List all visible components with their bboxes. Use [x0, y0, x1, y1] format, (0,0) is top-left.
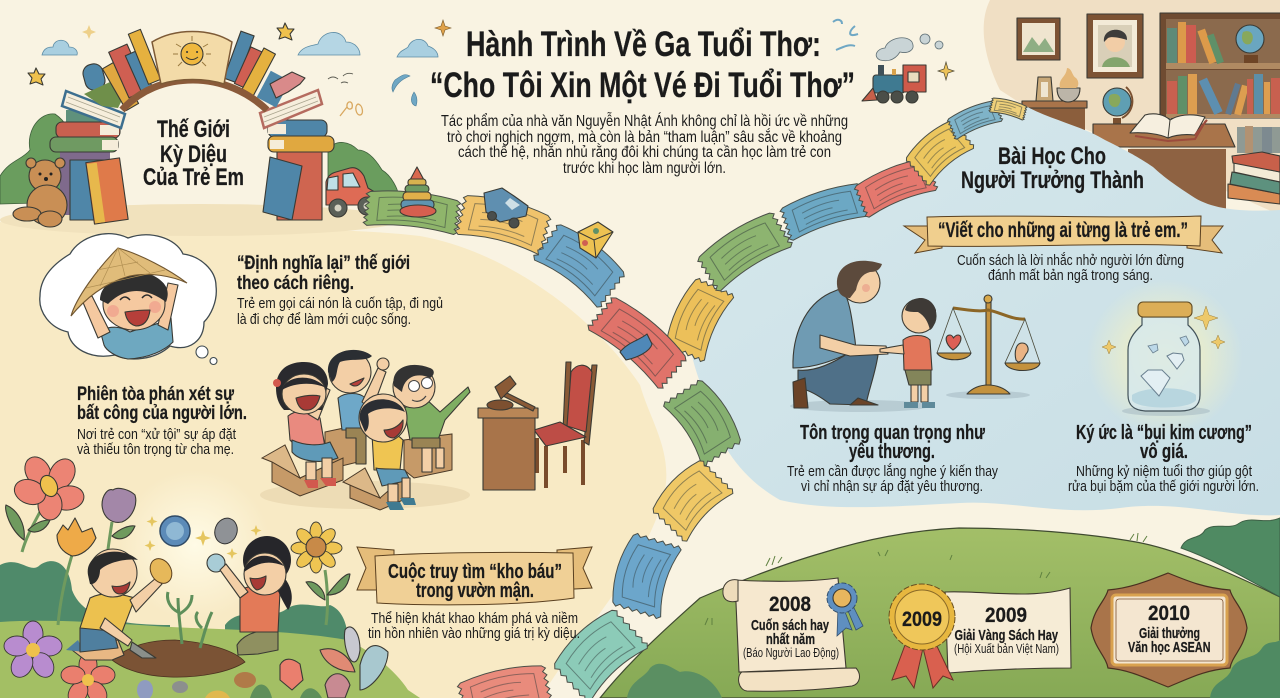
garden background bushes: [0, 561, 170, 640]
desk: [1093, 124, 1280, 211]
arch band: [122, 80, 267, 110]
bush bottom centre: [627, 664, 722, 698]
girl holding coin: [220, 536, 292, 655]
arch right stack: [260, 90, 334, 220]
award: 2008 scroll: Cuốn sách hay: [751, 617, 829, 634]
soil mound: [112, 640, 245, 677]
thought bubble: child with conical hat: [40, 234, 217, 364]
room wall: [984, 0, 1280, 215]
text: respect: yêu thương.: [849, 441, 935, 463]
ribbon: written for those who were children: “Viết cho những ai từng là trẻ em.”: [938, 219, 1188, 242]
text: respect: Trẻ em cần được lắng nghe ý kiến thay: [787, 463, 999, 480]
hat toy on red ticket: [620, 334, 652, 360]
purple flower: [4, 621, 62, 681]
award: 2009 gold medal and flag: 2009: [985, 604, 1027, 627]
illustration: balance scale: [937, 295, 1040, 399]
blue truck: [484, 188, 528, 228]
ribbon: treasure hunt: [357, 547, 592, 605]
toy train: [862, 34, 943, 103]
main title: “Cho Tôi Xin Một Vé Đi Tuổi Thơ”: [430, 66, 855, 105]
intro text: trò chơi nghịch ngợm, mà còn là bản “tham luận” sâu sắc về khoảng: [447, 129, 842, 146]
medal ribbons: [892, 642, 953, 688]
ribbon: treasure hunt: trong vườn mận.: [416, 580, 534, 602]
award: 2008 scroll: 2008: [769, 593, 811, 616]
background: arch ground: [0, 204, 400, 236]
teddy bear: [13, 158, 67, 227]
illustration: father and child handshake: [790, 261, 936, 412]
bubble: [40, 234, 216, 359]
text: children's court: và thiếu tôn trọng từ cha mẹ.: [77, 442, 234, 458]
title: magic world: Kỳ Diệu: [160, 141, 227, 168]
boxes: [262, 425, 452, 510]
arch left stack: [50, 91, 128, 224]
text: book reminder: [957, 252, 1184, 284]
toys on tickets: [400, 167, 652, 360]
intro text: [441, 113, 848, 177]
illustration: children on boxes: [260, 350, 470, 510]
child face: [103, 278, 165, 330]
bush top right: [1181, 518, 1280, 597]
side cabinet with photo and bowl: [1022, 68, 1087, 130]
award: 2010 wooden plaque: Giải thưởng: [1139, 625, 1200, 642]
text: diamond dust memories: [1068, 422, 1259, 495]
child arms: [82, 283, 178, 338]
ground: [0, 621, 420, 698]
bush left: [0, 114, 74, 204]
child shirt: [100, 318, 173, 359]
conical hat: [71, 248, 187, 316]
text: book reminder: đánh mất bản ngã trong sáng.: [988, 268, 1153, 284]
girl: [273, 362, 338, 488]
room illustration: [984, 0, 1280, 215]
red flower: [61, 653, 115, 698]
arch books on top: [81, 29, 305, 110]
title: magic world: [143, 116, 244, 191]
toy car: [326, 168, 380, 217]
text: respect: Tôn trọng quan trọng như: [800, 422, 985, 444]
ribbon: written for those who were children: [904, 216, 1223, 253]
title: magic world: Thế Giới: [157, 116, 230, 143]
text: redefine the world: [237, 252, 443, 328]
heading: lessons for adults: Bài Học Cho: [998, 143, 1106, 170]
bush bottom right: [1210, 640, 1280, 698]
text: children's court: [77, 383, 247, 458]
award: 2009 gold medal and flag: (Hội Xuất bản Việt Nam): [954, 642, 1059, 656]
text: redefine the world: theo cách riêng.: [237, 272, 354, 294]
illustration: judge's desk, gavel and chair: [478, 362, 597, 490]
blue shirt boy: [328, 350, 389, 464]
large leaves foreground: [205, 627, 388, 698]
text: respect: [787, 422, 999, 495]
bush right: [328, 142, 398, 194]
sunflower: [291, 522, 350, 625]
boy: [880, 298, 936, 408]
bookshelf: [1160, 13, 1280, 118]
text: diamond dust memories: vô giá.: [1140, 441, 1188, 463]
podium: [478, 408, 538, 490]
father: [793, 261, 888, 408]
garden scene: [0, 452, 420, 698]
illustration: jar of diamond dust: [1087, 279, 1243, 435]
small landscape picture: [1017, 18, 1060, 60]
award: 2008 scroll: [723, 578, 863, 691]
background: warm childhood zone: [0, 222, 666, 698]
award: 2010 wooden plaque: Văn học ASEAN: [1128, 639, 1210, 656]
seedlings: [167, 592, 212, 648]
award: 2010 wooden plaque: 2010: [1148, 602, 1190, 625]
text: diamond dust memories: Những kỷ niệm tuổi thơ giúp gột: [1076, 464, 1252, 480]
pebbles: [137, 672, 256, 698]
arch sun sign: [152, 32, 232, 84]
stack of books on desk: [1228, 152, 1280, 204]
gavel: [487, 376, 535, 411]
floating coins: [144, 515, 262, 572]
heart: [946, 335, 961, 350]
rosette: [827, 583, 863, 636]
toy block: [578, 222, 613, 258]
chair: [534, 362, 597, 488]
grass tufts on hill: [705, 533, 1147, 625]
text: book reminder: Cuốn sách là lời nhắc nhở người lớn đừng: [957, 252, 1184, 269]
ticket path: [363, 96, 1028, 698]
text: redefine the world: là đi chợ để làm mới cuộc sống.: [237, 312, 411, 328]
sparkle near train: [938, 62, 954, 80]
background: blue adult zone: [690, 104, 1280, 515]
text: treasure hunt: [368, 611, 580, 642]
yellow shirt boy: [359, 394, 416, 510]
text: redefine the world: Trẻ em gọi cái nón là cuốn tập, đi ngủ: [237, 296, 443, 312]
ring toy: [400, 167, 436, 217]
gold medal: [889, 584, 955, 650]
title: magic world: Của Trẻ Em: [143, 164, 244, 191]
text: treasure hunt: tin hồn nhiên vào những giá trị kỳ diệu.: [368, 626, 580, 642]
main title: Hành Trình Về Ga Tuổi Thơ:: [466, 25, 821, 64]
text: children's court: Phiên tòa phán xét sự: [77, 383, 235, 405]
award: 2009 gold medal and flag: Giải Vàng Sách Hay: [954, 627, 1058, 644]
award: 2008 scroll: nhất năm: [766, 631, 815, 648]
text: children's court: bất công của người lớn.: [77, 402, 247, 424]
purple tulip: [102, 488, 136, 550]
text: respect: vì chỉ nhận sự áp đặt yêu thương.: [801, 479, 983, 495]
pink flower: [6, 452, 86, 552]
award: 2010 wooden plaque: [1091, 573, 1247, 687]
hill: [600, 528, 1280, 698]
heading: lessons for adults: Người Trưởng Thành: [961, 167, 1144, 194]
main title: [430, 25, 855, 105]
clouds, stars, birds and balloon: [28, 20, 858, 116]
text: treasure hunt: Thể hiện khát khao khám phá và niềm: [371, 611, 578, 627]
portrait picture: [1087, 14, 1143, 78]
ear: [1015, 343, 1028, 362]
ribbon: treasure hunt: Cuộc truy tìm “kho báu”: [388, 561, 562, 583]
boy digging: [66, 549, 176, 660]
desk globe: [1103, 87, 1132, 126]
glasses boy: [393, 365, 470, 472]
section: magic world of children: [0, 29, 398, 227]
text: redefine the world: “Định nghĩa lại” thế giới: [237, 252, 410, 274]
award: 2009 gold medal and flag: [889, 584, 1071, 688]
intro text: cách thế hệ, nhắn nhủ rằng đôi khi chúng ta cần học làm trẻ con: [458, 144, 831, 161]
intro text: trước khi học làm người lớn.: [563, 160, 726, 177]
text: children's court: Nơi trẻ con “xử tội” sự áp đặt: [77, 427, 236, 443]
heading: lessons for adults: [961, 143, 1144, 194]
open book on desk: [1130, 114, 1207, 141]
garden glow: [120, 470, 270, 620]
gold medal: 2009: [902, 608, 942, 631]
orange tulip: [57, 518, 96, 625]
award: 2008 scroll: (Báo Người Lao Động): [743, 646, 839, 660]
intro text: Tác phẩm của nhà văn Nguyễn Nhật Ánh không chỉ là hồi ức về những: [441, 113, 848, 130]
